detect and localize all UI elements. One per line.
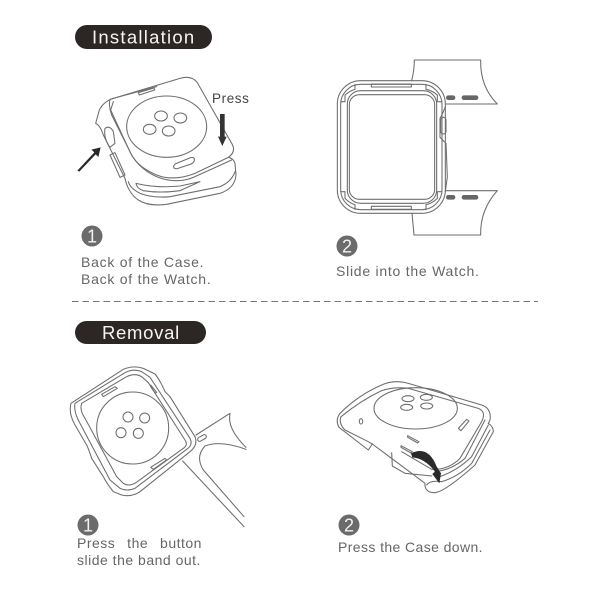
illustration: pressing the case down — [337, 382, 493, 493]
heading: Installation: Installation — [92, 26, 195, 48]
illustration: pressing watch into case — [77, 77, 236, 205]
caption: removal step 1: slide the band out. — [77, 552, 201, 568]
illustration: watch with case and band — [337, 60, 497, 235]
heading: Removal — [75, 321, 206, 344]
caption: removal step 1: Press the button — [77, 535, 202, 551]
caption: removal step 2: Press the Case down. — [338, 539, 483, 555]
caption: step 2: Slide into the Watch. — [336, 263, 480, 279]
step 2 number — [336, 236, 358, 256]
illustration: band removal from case back — [70, 367, 246, 527]
step 1 number — [82, 226, 102, 246]
step 2 number: 2 — [342, 236, 352, 256]
step 1 number — [78, 514, 98, 536]
step 1 number: 1 — [83, 516, 93, 536]
step 2 number — [338, 514, 360, 536]
heading: Removal: Removal — [102, 322, 180, 343]
step 2 number: 2 — [344, 516, 354, 536]
caption: step 1: Back of the Case. — [81, 254, 204, 270]
caption: step 1: Back of the Watch. — [81, 271, 211, 287]
label: Press: Press — [212, 91, 250, 106]
heading: Installation — [75, 25, 212, 49]
step 1 number: 1 — [87, 226, 97, 246]
